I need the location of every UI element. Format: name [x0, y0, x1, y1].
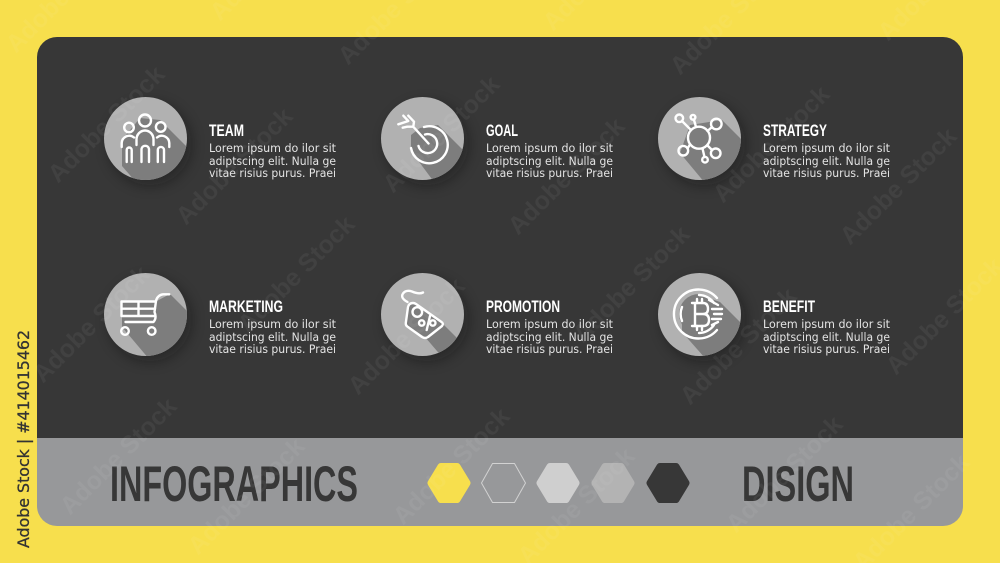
- icon: strategy network: [676, 114, 722, 162]
- description: promotion: adiptscing elit. Nulla ge: [486, 330, 613, 344]
- icon: bitcoin coin: [674, 289, 722, 338]
- bottom band: [37, 438, 963, 526]
- watermarks: Adobe Stock: [707, 80, 835, 208]
- colour hexagons: [431, 464, 686, 502]
- description: promotion: vitae risius purus. Praei: [486, 342, 613, 356]
- label: strategy: STRATEGY: [763, 121, 827, 140]
- watermarks: Adobe Stock: [54, 392, 182, 520]
- item: goal: [381, 97, 614, 190]
- item: team: [104, 97, 336, 187]
- description: goal: vitae risius purus. Praei: [486, 166, 613, 180]
- description: marketing: [209, 317, 337, 356]
- description: goal: Lorem ipsum do ilor sit: [486, 141, 614, 155]
- watermarks: Adobe Stock: [502, 112, 630, 240]
- description: marketing: adiptscing elit. Nulla ge: [209, 330, 336, 344]
- item: promotion: [381, 273, 614, 372]
- description: promotion: [486, 317, 614, 356]
- watermarks: Adobe Stock: [170, 102, 298, 230]
- description: team: [209, 141, 337, 180]
- label: marketing: MARKETING: [209, 297, 283, 316]
- watermarks: Adobe Stock: [387, 402, 515, 530]
- description: promotion: Lorem ipsum do ilor sit: [486, 317, 614, 331]
- watermarks: Adobe Stock: [567, 220, 695, 348]
- description: benefit: vitae risius purus. Praei: [763, 342, 890, 356]
- watermarks: Adobe Stock: [232, 210, 360, 338]
- description: team: Lorem ipsum do ilor sit: [209, 141, 337, 155]
- stock id text: Adobe Stock | #414015462: [14, 330, 33, 548]
- watermarks: Adobe Stock: [720, 410, 848, 538]
- icon: team: [122, 114, 169, 162]
- label: promotion: PROMOTION: [486, 297, 560, 316]
- description: strategy: Lorem ipsum do ilor sit: [763, 141, 891, 155]
- dark panel: [37, 37, 963, 438]
- icon: shopping cart: [121, 294, 169, 335]
- label: benefit: BENEFIT: [763, 297, 815, 316]
- watermarks: Adobe Stock: [834, 122, 962, 250]
- description: benefit: adiptscing elit. Nulla ge: [763, 330, 890, 344]
- description: marketing: vitae risius purus. Praei: [209, 342, 336, 356]
- description: goal: adiptscing elit. Nulla ge: [486, 154, 613, 168]
- description: strategy: [763, 141, 891, 180]
- watermarks: Adobe Stock: [27, 260, 155, 388]
- description: team: vitae risius purus. Praei: [209, 166, 336, 180]
- title: disign: DISIGN: [742, 456, 854, 512]
- label: team: TEAM: [209, 121, 244, 140]
- watermarks: Adobe Stock: [674, 282, 802, 410]
- description: benefit: [763, 317, 891, 356]
- watermarks: Adobe Stock: [377, 70, 505, 198]
- description: strategy: adiptscing elit. Nulla ge: [763, 154, 890, 168]
- description: team: adiptscing elit. Nulla ge: [209, 154, 336, 168]
- watermarks: Adobe Stock: [182, 432, 310, 560]
- item: strategy: [658, 97, 891, 195]
- description: benefit: Lorem ipsum do ilor sit: [763, 317, 891, 331]
- description: goal: [486, 141, 614, 180]
- item: benefit: [658, 273, 890, 363]
- icon: price tag: [402, 291, 443, 338]
- description: strategy: vitae risius purus. Praei: [763, 166, 890, 180]
- item: marketing: [104, 273, 337, 372]
- watermarks: Adobe Stock: [342, 272, 470, 400]
- title: infographics: INFOGRAPHICS: [110, 456, 358, 512]
- icon: goal: [398, 116, 448, 163]
- label: goal: GOAL: [486, 121, 518, 140]
- description: marketing: Lorem ipsum do ilor sit: [209, 317, 337, 331]
- watermarks: Adobe Stock: [42, 60, 170, 188]
